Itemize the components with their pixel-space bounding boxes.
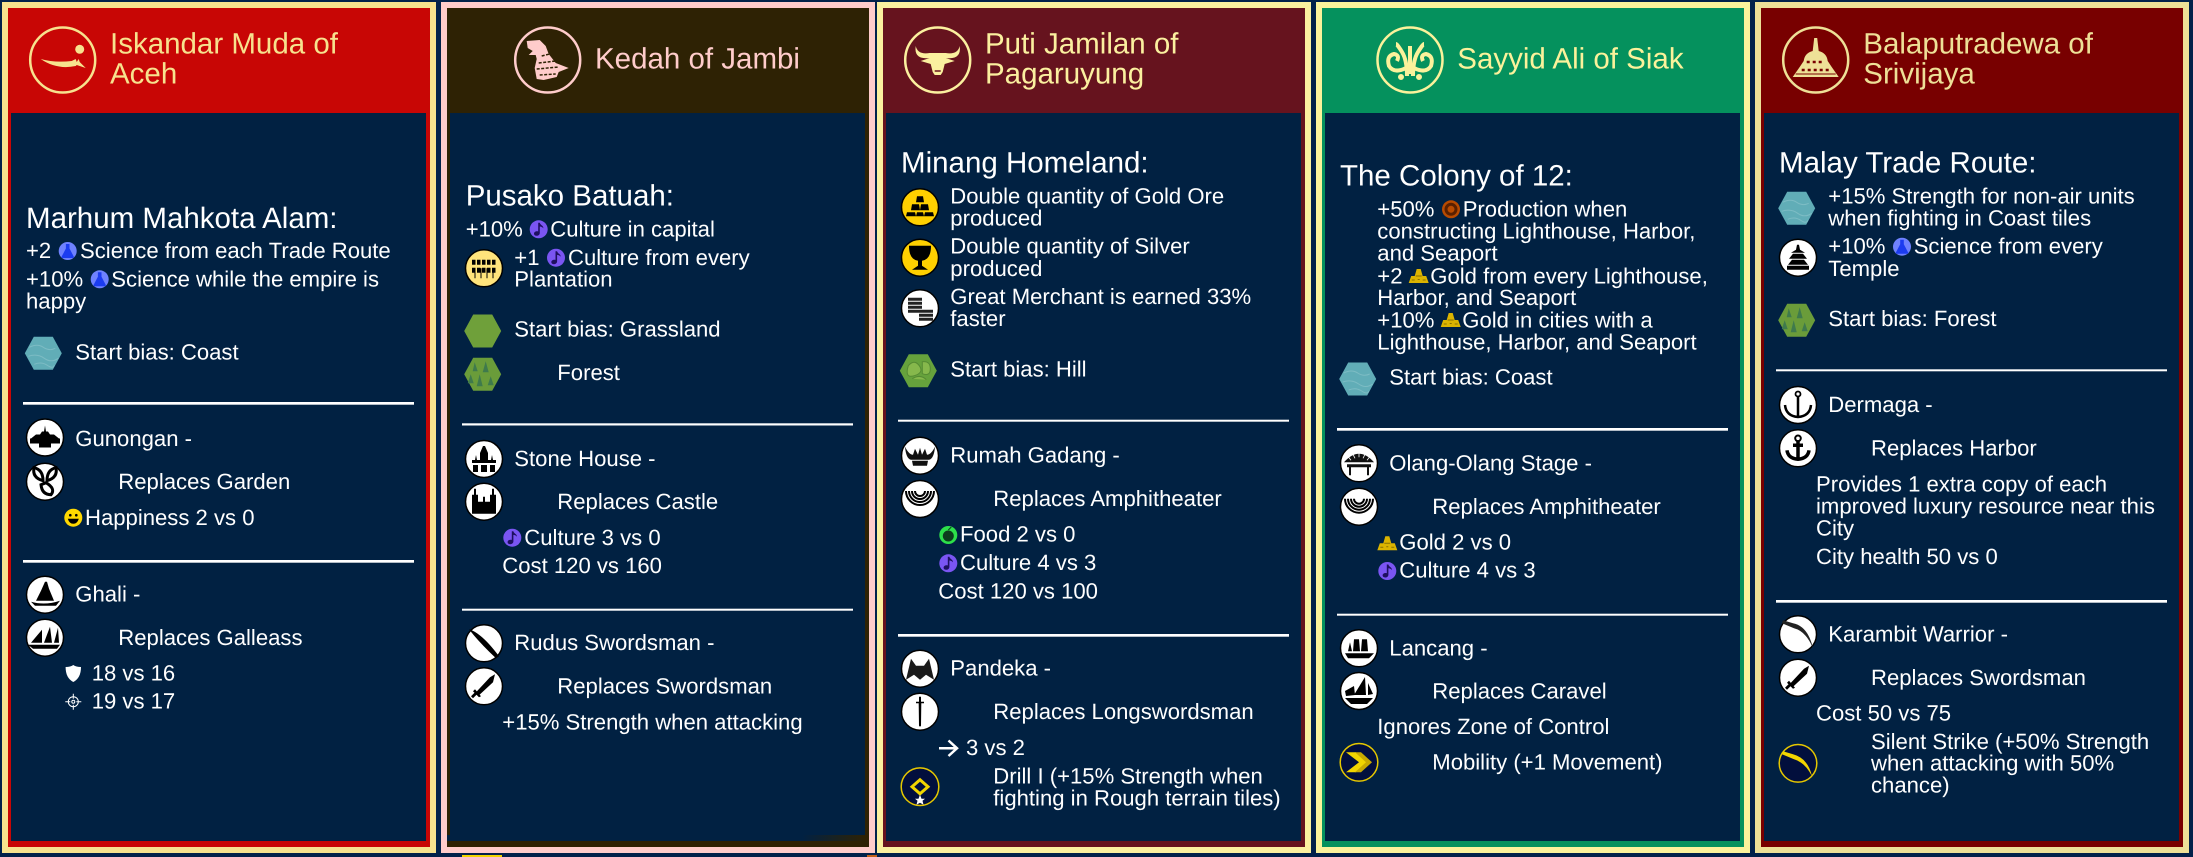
ability text — [1377, 197, 1708, 354]
icon: Caravel — [1340, 672, 1378, 710]
ability text — [466, 217, 715, 242]
ability text: Provides 1 extra copy of each — [1816, 472, 2107, 497]
start bias: Start bias: Hill — [950, 357, 1087, 382]
promotion text: chance) — [1871, 773, 1950, 798]
start bias: Start bias: Grassland — [514, 317, 721, 342]
icon: Castle — [466, 483, 502, 520]
ability text: Gold in cities with a — [1462, 307, 1653, 332]
icon: Amphitheater — [902, 480, 938, 518]
ability: silver: Double quantity of Silver — [950, 233, 1190, 258]
promotion text — [1870, 729, 2149, 798]
title: Puti Jamilan of — [985, 28, 1179, 60]
stat: cost: Cost 50 vs 75 — [1816, 701, 1951, 726]
icon: Dermaga — [1780, 386, 1816, 424]
title: Pagaruyung — [985, 58, 1144, 90]
promotion text: when attacking with 50% — [1870, 751, 2114, 776]
stat: movement — [939, 735, 1025, 760]
icon: Swordsman — [1780, 659, 1816, 696]
icon: Garden — [26, 463, 64, 500]
emblem: stupa — [1783, 28, 1848, 92]
start bias — [900, 354, 1087, 387]
ability: zone of control: Ignores Zone of Control — [1377, 714, 1609, 739]
replaces text: Replaces Swordsman — [557, 674, 772, 699]
replaces text: Replaces Longswordsman — [993, 699, 1254, 724]
promotion text: Silent Strike (+50% Strength — [1871, 729, 2149, 754]
promotion text: Drill I (+15% Strength when — [993, 763, 1263, 788]
icon: Longswordsman — [902, 693, 938, 730]
stat: culture: Culture 3 vs 0 — [524, 525, 661, 550]
unique unit name: Ghali - — [75, 582, 140, 607]
ability text: +10% — [466, 217, 523, 242]
ability text: Science while the empire is — [111, 267, 379, 292]
stat: city health: City health 50 vs 0 — [1816, 544, 1998, 569]
ability: coast strength — [1778, 183, 2135, 230]
ability: great merchant — [902, 284, 1251, 331]
emblem: ornament — [1378, 28, 1442, 92]
ability text: Harbor, and Seaport — [1377, 285, 1576, 310]
ability: great merchant: Great Merchant is earned 33% — [950, 284, 1251, 309]
unique unit name: Karambit Warrior - — [1828, 621, 2008, 646]
panel: Sayyid Ali of Siak — [1316, 2, 1750, 853]
icon: Mobility promotion — [1340, 744, 1378, 781]
heading: unique ability: Marhum Mahkota Alam: — [26, 202, 338, 235]
ability text: plantation — [514, 245, 750, 292]
unique unit name: Pandeka - — [950, 656, 1051, 681]
heading: unique ability: Malay Trade Route: — [1779, 147, 2036, 180]
promotion text — [993, 763, 1281, 810]
ability text: plantation: Culture from every — [568, 245, 750, 270]
start bias: Forest — [557, 360, 620, 385]
icon: Drill promotion — [901, 768, 939, 806]
stat: cost: Cost 120 vs 160 — [502, 553, 662, 578]
emblem: bull — [905, 28, 970, 92]
stat: cost: Cost 120 vs 100 — [938, 578, 1098, 603]
ability text: +2 — [1377, 263, 1403, 288]
ability text: Lighthouse, Harbor, and Seaport — [1377, 329, 1697, 354]
unique unit name: Rudus Swordsman - — [514, 630, 714, 655]
start bias — [464, 314, 721, 391]
ability text: happy — [26, 288, 86, 313]
stat: movement: 3 vs 2 — [966, 735, 1025, 760]
ability text — [1816, 472, 2155, 541]
ability text: Gold from every Lighthouse, — [1430, 263, 1708, 288]
panel: Iskandar Muda of Aceh — [2, 2, 436, 853]
title: Balaputradewa of — [1863, 28, 2094, 60]
replaces text: Replaces Garden — [118, 469, 290, 494]
panel: Kedah of Jambi — [441, 2, 875, 853]
ability text: plantation: Plantation — [514, 267, 613, 292]
title — [110, 28, 339, 90]
stat: culture: Culture 4 vs 3 — [960, 550, 1096, 575]
unique unit name: Lancang - — [1389, 635, 1488, 660]
panel: Balaputradewa of Srivijaya — [1755, 2, 2189, 853]
icon: Lancang — [1340, 630, 1378, 667]
icon: Plantation — [466, 250, 502, 287]
start bias — [25, 337, 239, 370]
ability text: +2 — [26, 238, 51, 263]
replaces text: Replaces Caravel — [1432, 678, 1607, 703]
icon: Stone House — [466, 440, 502, 478]
emblem: sword — [30, 28, 95, 92]
emblem: tiger — [515, 28, 580, 92]
title: Srivijaya — [1863, 58, 1975, 90]
unique building name: Olang-Olang Stage - — [1389, 451, 1592, 476]
ability: coast strength: when fighting in Coast tiles — [1827, 205, 2091, 230]
icon: Silent Strike promotion — [1779, 744, 1817, 782]
replaces text: Replaces Galleass — [118, 625, 303, 650]
replaces text: Replaces Harbor — [1871, 436, 2037, 461]
heading: unique ability: Minang Homeland: — [901, 147, 1149, 180]
unique building name: Dermaga - — [1828, 392, 1933, 417]
ability text: plantation: +1 — [514, 245, 540, 270]
ability text: Production when — [1463, 197, 1627, 222]
ability: gold ore — [902, 183, 1224, 230]
ability: great merchant: faster — [950, 306, 1006, 331]
stat: culture: Culture 4 vs 3 — [1399, 558, 1536, 583]
heading: unique ability: The Colony of 12: — [1340, 160, 1573, 193]
ability text: constructing Lighthouse, Harbor, — [1377, 219, 1695, 244]
ability text: +10% — [1377, 307, 1434, 332]
ability text: Science from each Trade Route — [80, 238, 391, 263]
start bias: Start bias: Coast — [75, 339, 239, 364]
icon: Swordsman — [466, 668, 502, 705]
ability: temple science: Temple — [1828, 256, 1900, 281]
replaces text: Replaces Swordsman — [1871, 665, 2086, 690]
title: Iskandar Muda of — [110, 28, 339, 60]
icon: Olang-Olang Stage — [1340, 445, 1378, 482]
ability: silver — [902, 233, 1190, 281]
icon: Amphitheater — [1340, 488, 1378, 525]
panel: Puti Jamilan of Pagaruyung — [877, 2, 1311, 853]
start bias — [1339, 362, 1553, 396]
ability text: and Seaport — [1377, 241, 1498, 266]
replaces text: Replaces Amphitheater — [993, 486, 1222, 511]
start bias — [1778, 304, 1997, 337]
start bias: Start bias: Coast — [1389, 364, 1553, 389]
stat: strength: 18 vs 16 — [92, 661, 175, 686]
unique building name: Stone House - — [514, 446, 656, 471]
icon: Rumah Gadang — [902, 437, 938, 474]
icon: Karambit Warrior — [1780, 616, 1816, 653]
icon: Gunongan — [26, 419, 64, 456]
title: Aceh — [110, 58, 177, 90]
ability text: Culture in capital — [550, 217, 715, 242]
icon: Ghali — [26, 576, 64, 613]
icon: Rudus — [466, 625, 502, 662]
heading: unique ability: Pusako Batuah: — [466, 180, 674, 213]
title: Sayyid Ali of Siak — [1457, 42, 1684, 75]
ability text: +10% — [26, 267, 83, 292]
icon: Galleass — [26, 619, 64, 656]
unique building name: Gunongan - — [75, 426, 192, 451]
ability: gold ore: Double quantity of Gold Ore — [950, 183, 1224, 208]
stat: food: Food 2 vs 0 — [960, 522, 1075, 547]
ability: silver: produced — [950, 256, 1042, 281]
replaces text: Replaces Amphitheater — [1432, 494, 1661, 519]
icon: Pandeka — [902, 650, 938, 687]
ability: gold ore: produced — [950, 205, 1042, 230]
stat: happiness: Happiness 2 vs 0 — [85, 505, 254, 530]
promotion text: fighting in Rough terrain tiles) — [993, 785, 1281, 810]
ability: coast strength: +15% Strength for non-air units — [1828, 183, 2135, 208]
title — [1863, 28, 2094, 90]
ability text — [26, 238, 391, 313]
stat: gold: Gold 2 vs 0 — [1399, 529, 1511, 554]
ability: temple science: +10% — [1828, 233, 1885, 258]
ability text: +50% — [1377, 197, 1434, 222]
start bias: Start bias: Forest — [1828, 306, 1997, 331]
title — [985, 28, 1179, 90]
ability text: improved luxury resource near this — [1816, 494, 2155, 519]
unique building name: Rumah Gadang - — [950, 443, 1120, 468]
ability: temple science — [1780, 233, 2103, 281]
promotion text: Mobility (+1 Movement) — [1432, 750, 1663, 775]
replaces text: Replaces Castle — [557, 489, 718, 514]
icon: Harbor — [1780, 430, 1816, 467]
ability text: City — [1816, 516, 1854, 541]
ability: temple science: Science from every — [1914, 233, 2103, 258]
title: Kedah of Jambi — [595, 42, 800, 75]
stat: ranged strength: 19 vs 17 — [92, 689, 175, 714]
stat: strength bonus: +15% Strength when attacking — [502, 709, 803, 734]
